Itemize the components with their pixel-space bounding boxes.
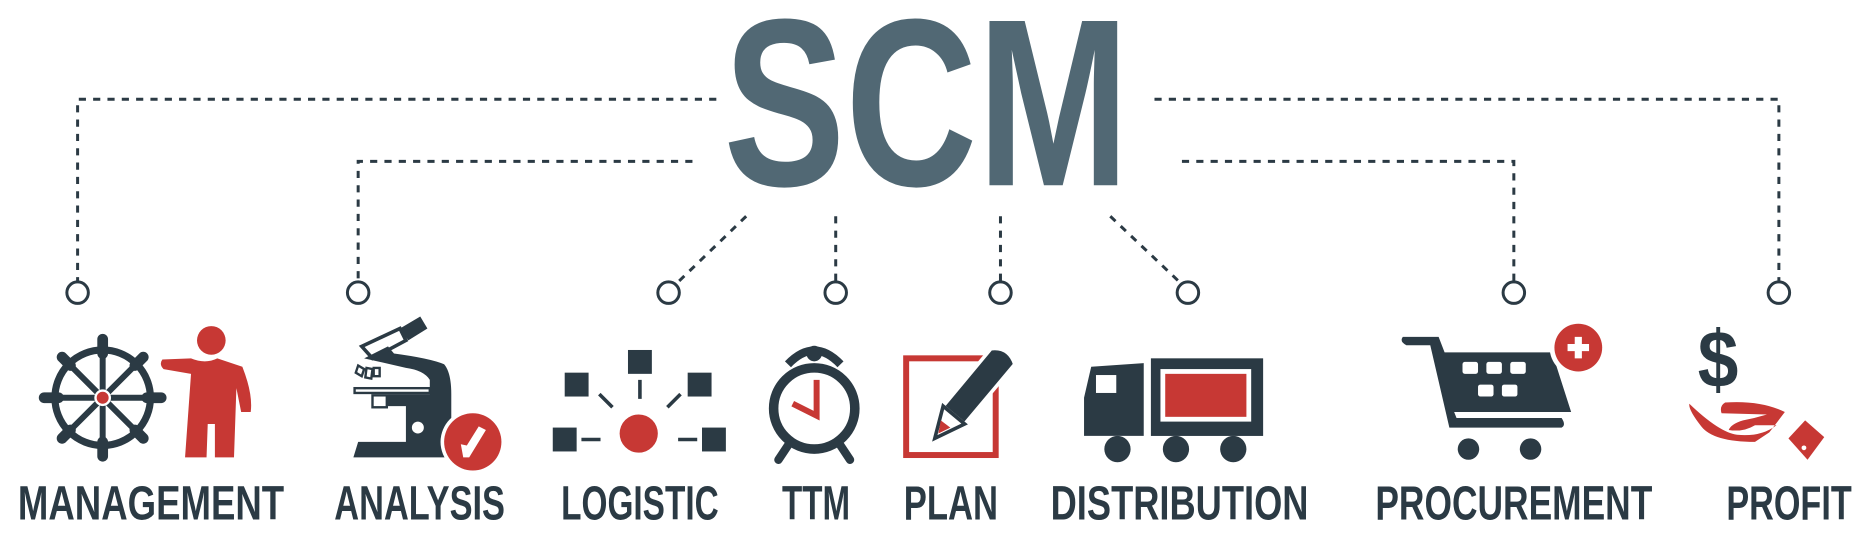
icon: logistic network <box>553 350 726 453</box>
label: ttm: TTM <box>782 478 850 531</box>
label: management: MANAGEMENT <box>18 478 284 531</box>
icon: cart <box>1402 319 1607 460</box>
icon: person <box>161 326 251 457</box>
labels <box>18 478 1852 531</box>
connector circles <box>67 282 1790 303</box>
label: distribution: DISTRIBUTION <box>1051 478 1308 531</box>
label: plan: PLAN <box>904 478 998 531</box>
label: logistic: LOGISTIC <box>561 478 719 531</box>
icon: ship wheel <box>44 339 161 456</box>
icon: clock <box>774 346 855 460</box>
icon: plan <box>906 348 1015 455</box>
label: analysis: ANALYSIS <box>334 478 505 531</box>
icon: truck <box>1084 358 1263 462</box>
icon: microscope <box>353 317 505 474</box>
label: procurement: PROCUREMENT <box>1375 478 1652 531</box>
connector lines <box>78 99 1779 284</box>
icon: profit hand: $ <box>1698 315 1738 405</box>
icon: profit hand <box>1689 315 1824 460</box>
